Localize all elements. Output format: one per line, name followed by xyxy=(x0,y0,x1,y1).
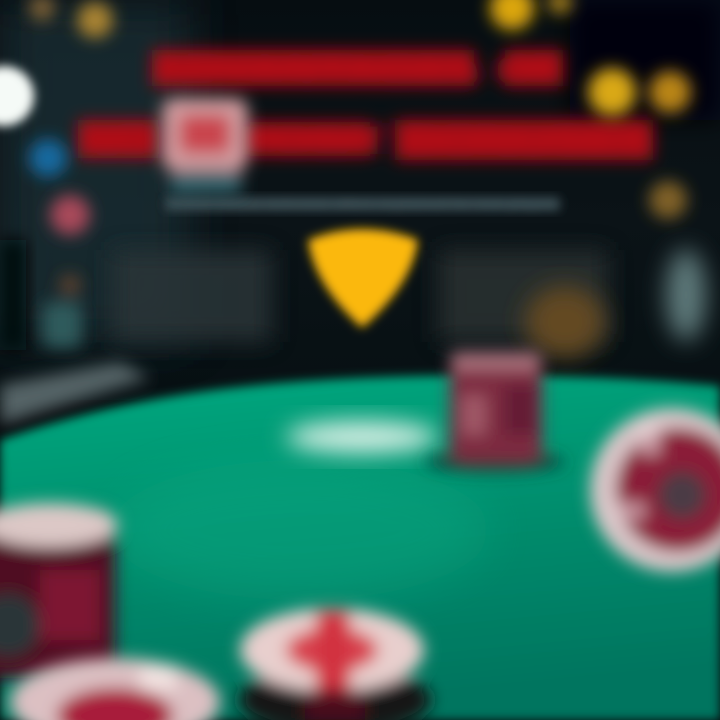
subtitle: Online casino welcome offers explained for new players xyxy=(165,196,560,212)
chip stack: bottom left xyxy=(0,503,118,678)
background: dark casino room xyxy=(0,0,720,400)
chip: bottom left foreground xyxy=(10,658,220,720)
left side lights xyxy=(0,66,90,235)
decorative gold coins xyxy=(29,0,691,219)
icon: white and red card xyxy=(162,98,248,194)
chip stack: centre right xyxy=(425,352,565,472)
chip: right large xyxy=(590,408,720,572)
title line two: NO DEPOSIT BONUSES xyxy=(78,119,653,163)
panel: green felt table xyxy=(0,375,720,720)
title: red headline text xyxy=(78,49,653,163)
right side figures xyxy=(525,249,706,358)
table rail xyxy=(0,362,150,425)
white card on table xyxy=(286,421,438,453)
chip: bottom centre xyxy=(239,608,431,720)
icon: white glow xyxy=(0,66,34,126)
title line one: ADVANTAGES OF xyxy=(150,49,562,93)
figure: left small teal shape xyxy=(42,274,82,348)
icon: yellow shield xyxy=(308,229,418,328)
icon: red and white dot xyxy=(50,195,90,235)
icon: blue dot xyxy=(29,139,67,177)
